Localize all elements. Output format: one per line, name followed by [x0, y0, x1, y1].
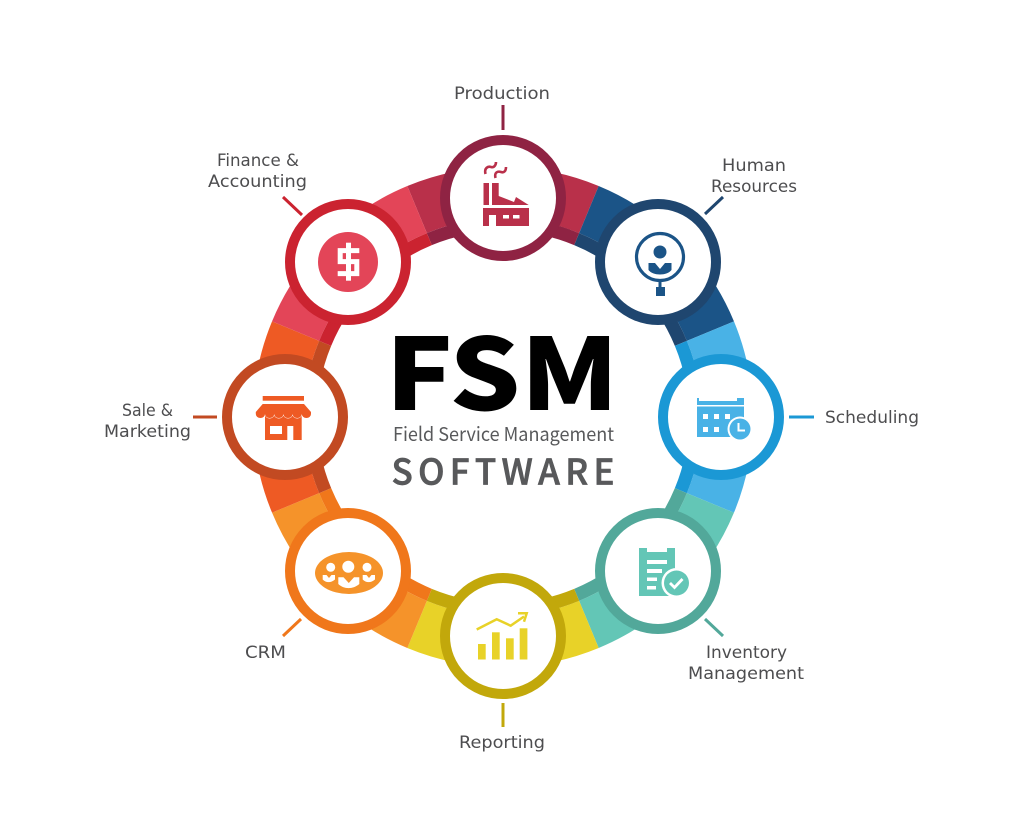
label: human resources: Resources: [711, 177, 797, 196]
node: production: [445, 105, 561, 256]
icon: bar chart with arrow: [477, 613, 527, 660]
segment: crm: [284, 482, 438, 636]
ring segments: [279, 193, 727, 641]
segment: sale and marketing: [279, 331, 325, 503]
node: crm: [283, 513, 406, 636]
icon: storefront: [256, 396, 311, 440]
label: sale and marketing: Sale &: [122, 401, 173, 420]
icon: magnified person: [636, 234, 684, 296]
icon: dollar coin: [318, 232, 378, 292]
icon: factory: [483, 162, 529, 226]
label: finance and accounting: Accounting: [208, 172, 307, 191]
label: human resources: [711, 156, 797, 196]
label: human resources: Human: [722, 156, 786, 175]
segment: production: [417, 193, 589, 239]
segment: finance: [284, 198, 438, 352]
node: sale and marketing: [193, 359, 343, 475]
label: finance and accounting: [208, 151, 307, 191]
label: reporting: Reporting: [459, 733, 545, 752]
node: human resources: [600, 197, 723, 320]
icon: group of people: [315, 552, 383, 594]
segment: scheduling: [681, 331, 727, 503]
icon: calendar and clock: [697, 398, 752, 442]
subtitle: software: SOFTWARE: [392, 444, 614, 496]
label: sale and marketing: [104, 401, 191, 441]
node: scheduling: [663, 359, 814, 475]
segment: reporting: [417, 595, 589, 641]
subtitle: field service management: Field Service Management: [393, 420, 614, 447]
node: finance and accounting: [283, 197, 406, 320]
label: finance and accounting: Finance &: [217, 151, 299, 170]
icon: checklist clipboard: [639, 548, 692, 598]
label: sale and marketing: Marketing: [104, 422, 191, 441]
label: inventory management: [688, 643, 805, 683]
title: FSM: FSM: [386, 295, 618, 439]
node: inventory management: [600, 513, 723, 636]
label: inventory management: Management: [688, 664, 805, 683]
label: scheduling: Scheduling: [825, 408, 919, 427]
label: crm: CRM: [245, 643, 286, 662]
label: production: Production: [454, 84, 550, 103]
label: inventory management: Inventory: [706, 643, 787, 662]
node: reporting: [445, 578, 561, 727]
segment: human resources: [568, 198, 722, 352]
segment: inventory: [568, 482, 722, 636]
